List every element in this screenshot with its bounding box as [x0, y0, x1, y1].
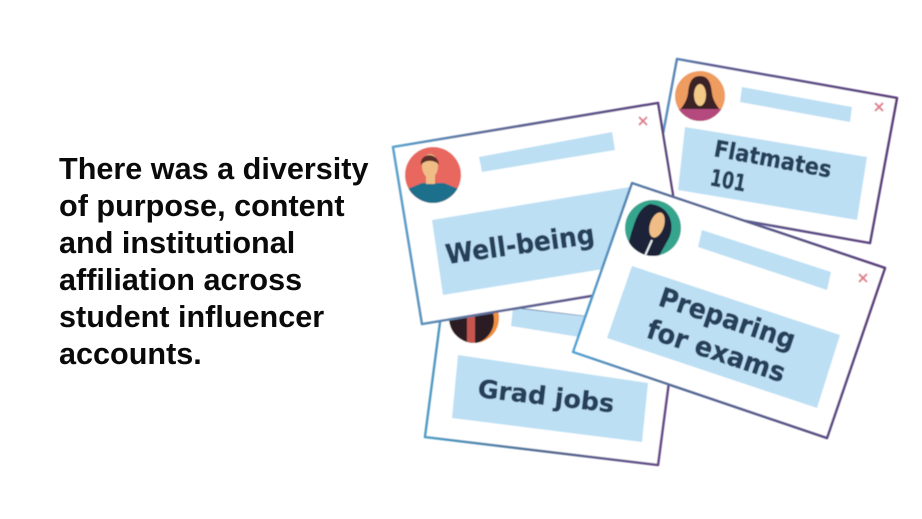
heading text: There was a diversity: [59, 152, 368, 186]
label panel: [432, 187, 640, 295]
label: Preparing for exams: [643, 282, 799, 389]
icon: close: [859, 274, 867, 282]
heading text: affiliation across: [59, 263, 302, 297]
label: Well-being: Well-being: [444, 219, 597, 271]
illustration: overlapping cards: [391, 57, 899, 467]
card: Flatmates 101: [650, 59, 897, 243]
label panel: [678, 127, 867, 220]
card: Well-being: [393, 103, 687, 324]
heading text: of purpose, content: [59, 189, 345, 223]
label: Grad jobs: Grad jobs: [476, 374, 616, 418]
avatar: woman with long hair: [675, 71, 725, 122]
label: Flatmates 101: Flatmates: [712, 136, 834, 184]
card: Grad jobs: [423, 308, 670, 467]
label: Flatmates 101: 101: [708, 165, 748, 197]
label panel: [607, 266, 840, 408]
label: Preparing for exams: for exams: [643, 314, 789, 389]
placeholder bar: [740, 87, 852, 122]
card: Preparing for exams: [573, 183, 885, 438]
heading text: accounts.: [59, 337, 202, 371]
label panel: [452, 355, 648, 442]
heading text: student influencer: [59, 300, 324, 334]
placeholder bar: [479, 132, 615, 172]
icon: close: [875, 103, 883, 111]
placeholder bar: [698, 230, 831, 290]
label: Preparing for exams: Preparing: [655, 282, 799, 356]
avatar: man: [405, 147, 461, 203]
placeholder bar: [511, 308, 600, 340]
avatar: dark hair person: [448, 312, 500, 344]
icon: close: [639, 117, 647, 125]
heading text: and institutional: [59, 226, 295, 260]
heading text: [59, 152, 368, 371]
avatar: woman on green: [625, 200, 681, 258]
